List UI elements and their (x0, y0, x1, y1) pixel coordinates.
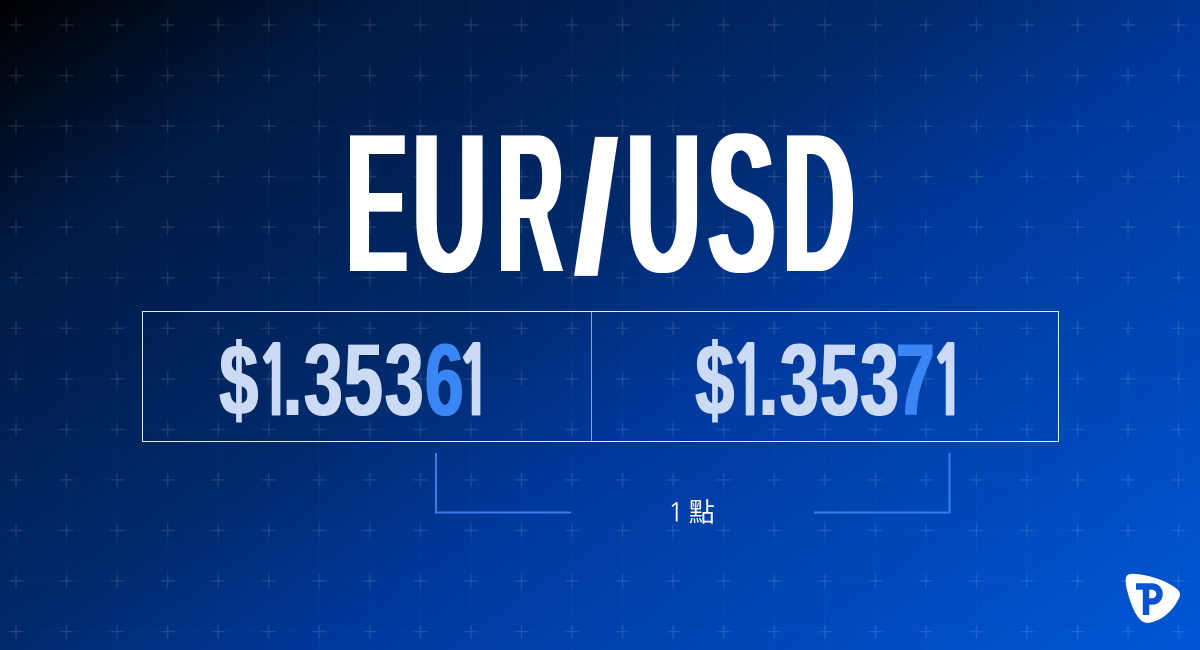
icon: logo (1126, 574, 1180, 623)
ask price: 1 (930, 335, 968, 430)
title: E (347, 91, 407, 317)
title: R (498, 91, 563, 317)
left bracket (436, 453, 571, 512)
title: U (413, 89, 486, 316)
bid price: 1 (456, 335, 494, 430)
bid price: 6 (425, 324, 464, 437)
ask price (696, 324, 968, 437)
right bracket (814, 453, 950, 512)
title: D (783, 90, 854, 316)
pip label: 1點 (668, 492, 720, 530)
ask price: 1 (730, 335, 768, 430)
bid price: .353 (283, 324, 423, 437)
ask price: $ (696, 324, 734, 437)
title: S (708, 89, 775, 316)
bid price (220, 324, 494, 437)
ask price: .353 (759, 324, 899, 437)
bid price: 1 (256, 335, 294, 430)
price box (142, 312, 1058, 442)
bid price: $ (220, 324, 258, 437)
title: / (575, 100, 617, 315)
title: U (627, 91, 700, 317)
ask price: 7 (896, 324, 935, 437)
title (347, 89, 854, 317)
